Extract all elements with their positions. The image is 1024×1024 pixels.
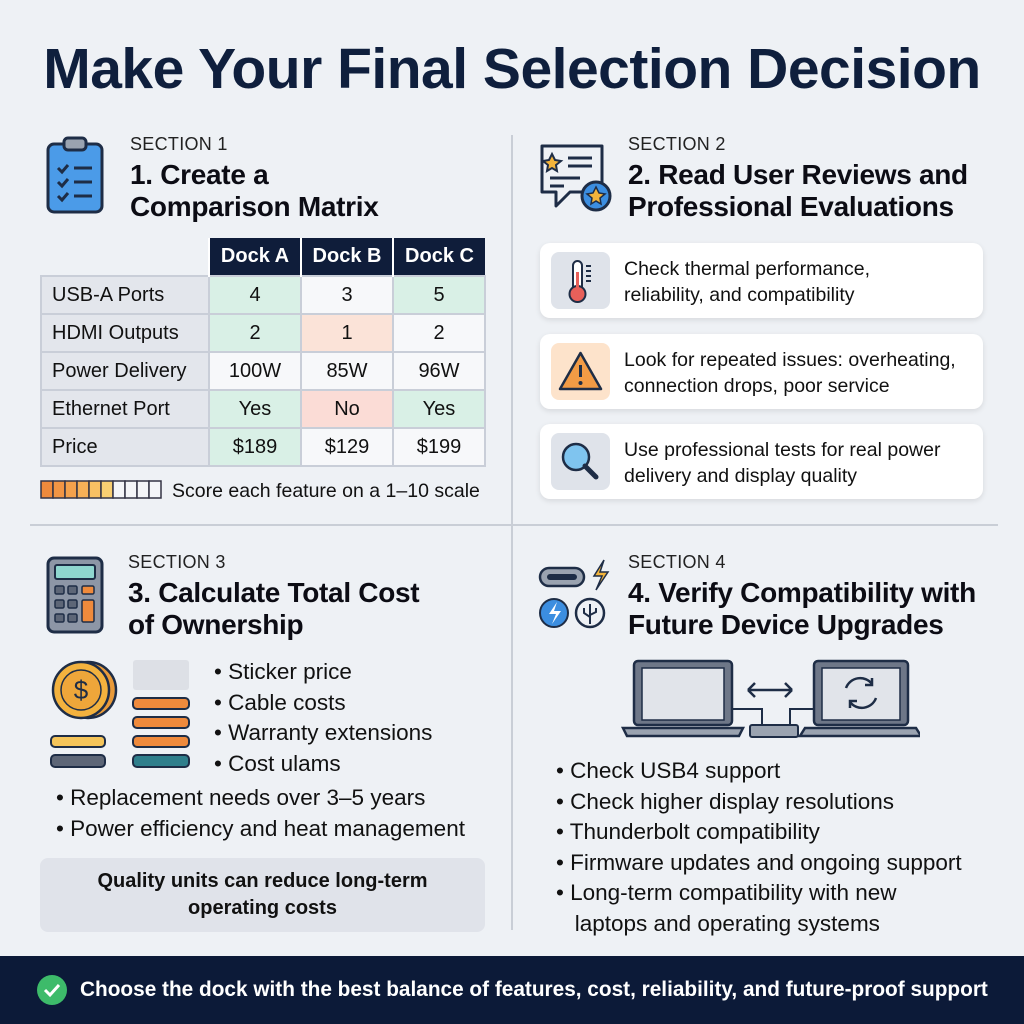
bullets: costs: • Cost ulams [214,750,341,776]
comparison table: Yes [239,398,271,420]
comparison table: Dock C [405,245,474,267]
illustration: laptops with dock [621,660,920,738]
panel: section 4 [538,552,976,936]
icon: calculator [46,556,104,634]
heading: SECTION 2 [628,134,726,154]
heading [628,552,976,640]
heading: 2. Read User Reviews and [628,159,968,190]
heading: 4. Verify Compatibility with [628,577,976,608]
comparison table: Dock A [221,245,289,267]
heading [130,134,378,222]
heading: SECTION 1 [130,134,228,154]
comparison table: USB-A Ports [52,284,164,306]
card: thermal: reliability, and compatibility [624,284,854,306]
icon: magnifier [551,433,610,490]
heading: of Ownership [128,609,303,640]
bullets: compatibility: • Check higher display resolutions [556,788,894,814]
comparison table: Power Delivery [52,360,186,382]
icon: reviews [540,144,612,212]
comparison table: 1 [341,322,353,344]
comparison table: 96W [418,360,460,382]
panel: section 3 [40,552,485,932]
bullets: compatibility: laptops and operating systems [575,910,880,936]
bullets: compatibility: • Long-term compatibility with new [556,880,897,905]
heading [128,552,420,640]
card: issues: connection drops, poor service [624,375,890,397]
icon: clipboard [46,136,104,214]
heading: SECTION 3 [128,552,226,572]
callout: operating costs [188,897,337,919]
comparison table: $199 [417,436,461,458]
heading: Comparison Matrix [130,191,378,222]
icon: check [37,975,67,1005]
footer banner [0,956,1024,1024]
card: issues: Look for repeated issues: overheating, [624,349,956,371]
bullets: compatibility: • Check USB4 support [556,758,780,783]
card: tests: delivery and display quality [624,465,857,487]
comparison table: $129 [325,436,369,458]
bullets: long-term: • Replacement needs over 3–5 years [56,785,425,810]
comparison table: 2 [433,322,445,344]
comparison table: No [334,398,360,420]
bullets: long-term: • Power efficiency and heat management [56,816,465,840]
icon: warning [551,343,610,400]
comparison table: 100W [229,360,281,382]
card: thermal [540,243,983,318]
comparison table: Ethernet Port [52,398,170,420]
bullets: costs: • Cable costs [214,690,346,714]
comparison table: 3 [341,284,353,306]
comparison table: Price [52,436,98,458]
callout [40,858,485,932]
scale text: Score each feature on a 1–10 scale [172,480,480,502]
icon: ports [538,560,610,628]
comparison table: 5 [433,284,445,306]
panel: section 1 [40,134,486,502]
icon: coins and bars [50,660,190,768]
bullets: compatibility [556,758,962,936]
card: tests [540,424,983,499]
card: thermal: Check thermal performance, [624,258,870,280]
icon: thermometer [551,252,610,309]
heading: 3. Calculate Total Cost [128,577,419,608]
comparison table: 2 [249,322,261,344]
heading: SECTION 4 [628,552,726,572]
comparison table: 85W [326,360,368,382]
comparison table: Dock B [313,245,381,267]
heading [628,134,968,222]
card: issues [540,334,983,409]
heading: Professional Evaluations [628,191,954,222]
scale bar [40,480,162,499]
bullets: costs: • Warranty extensions [214,720,432,745]
comparison table [40,238,486,467]
icon: coins and bars: $ [74,675,89,705]
panel: section 2 [539,134,984,502]
card: tests: Use professional tests for real power [624,439,940,461]
comparison table: Yes [423,398,455,420]
comparison table: $189 [233,436,277,458]
footer text: Choose the dock with the best balance of features, cost, reliability, and future-proof support [80,978,988,1001]
comparison table: HDMI Outputs [52,322,179,344]
bullets: long-term [56,785,465,840]
callout: Quality units can reduce long-term [97,870,428,892]
heading: 1. Create a [130,159,268,190]
bullets: costs: • Sticker price [214,659,352,684]
bullets: compatibility: • Thunderbolt compatibility [556,819,820,844]
title: Make Your Final Selection Decision [43,37,981,101]
comparison table: 4 [249,284,261,306]
heading: Future Device Upgrades [628,609,944,640]
bullets: compatibility: • Firmware updates and ongoing support [556,850,962,874]
bullets: costs [214,659,432,776]
